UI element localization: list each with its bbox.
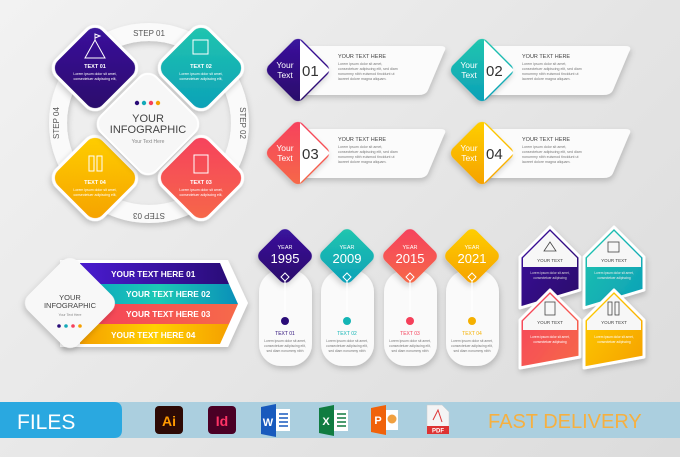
card 03: 03 [302, 146, 319, 163]
panel: step cycle [48, 21, 248, 225]
step labels: STEP 01 [133, 29, 165, 38]
banner bars: YOUR TEXT HERE 01 [111, 269, 196, 279]
arrow card teal: consectetuer adipiscing [597, 276, 631, 280]
diamond: text 01: Lorem ipsum dolor sit amet, [73, 72, 117, 76]
banner bars: YOUR TEXT HERE 03 [126, 309, 211, 319]
step labels: STEP 03 [133, 211, 165, 220]
card 01: Text [277, 70, 293, 80]
banner bars [60, 260, 248, 347]
diamond: text 03: TEXT 03 [190, 180, 212, 186]
diamond: text 04: TEXT 04 [84, 180, 107, 186]
column 1995: YEAR [278, 245, 293, 251]
white diamond: Your Text Here [59, 313, 82, 317]
column 2015: TEXT 03 [400, 331, 420, 337]
column 1995: consectetuer adipiscing elit, [264, 344, 306, 348]
footer bar [0, 402, 680, 438]
diamond: text 04: consectetuer adipiscing elit, [74, 193, 117, 197]
column 2009: sed diam nonummy nibh [329, 349, 366, 353]
card 03: Lorem ipsum dolor sit amet, [338, 145, 382, 149]
card 04 [448, 119, 630, 187]
arrow card yellow: YOUR TEXT [601, 320, 627, 325]
column 2015: consectetuer adipiscing elit, [389, 344, 431, 348]
card 03 [264, 119, 445, 187]
card 03: Your [276, 143, 294, 153]
column 2021: sed diam nonummy nibh [454, 349, 491, 353]
diamond: text 03: consectetuer adipiscing elit, [180, 193, 223, 197]
card 02 [448, 36, 630, 104]
icon: Id [208, 406, 236, 434]
column 2015: 2015 [396, 251, 424, 266]
column 2009: TEXT 02 [337, 331, 357, 337]
arrow card red: consectetuer adipiscing [533, 340, 567, 344]
column 2021: TEXT 04 [462, 331, 482, 337]
card 04: consectetuer adipiscing elit, sed diam [522, 150, 582, 154]
column 1995 [255, 226, 315, 366]
arrow card teal: YOUR TEXT [601, 258, 627, 263]
center diamond [93, 69, 203, 179]
step labels: STEP 04 [52, 107, 61, 139]
card 04: YOUR TEXT HERE [522, 137, 570, 143]
arrow card teal [584, 227, 644, 308]
column 2009: Lorem ipsum dolor sit amet, [326, 339, 368, 343]
column 1995: Lorem ipsum dolor sit amet, [264, 339, 306, 343]
diamond: text 02: consectetuer adipiscing elit, [180, 77, 223, 81]
center diamond: Your Text Here [132, 139, 165, 145]
column 2015: sed diam nonummy nibh [392, 349, 429, 353]
diamond: text 01: TEXT 01 [84, 64, 106, 70]
card 01: Your [276, 60, 294, 70]
card 02: Lorem ipsum dolor sit amet, [522, 62, 566, 66]
arrow card purple: YOUR TEXT [537, 258, 563, 263]
card 03: consectetuer adipiscing elit, sed diam [338, 150, 398, 154]
arrow card purple [520, 227, 580, 308]
diamond: text 04 [48, 131, 142, 225]
card 01: YOUR TEXT HERE [338, 54, 386, 60]
column 1995: 1995 [271, 251, 299, 266]
arrow card red: YOUR TEXT [537, 320, 563, 325]
arrow card red: Lorem ipsum dolor sit amet, [530, 335, 570, 339]
icon: Ai: Ai [162, 413, 176, 429]
card 01: nonummy nibh euismod tincidunt ut [338, 72, 395, 76]
arrow card yellow [584, 290, 644, 368]
column 2015: YEAR [403, 245, 418, 251]
panel: list banner [21, 254, 248, 352]
diamond: text 03 [154, 131, 248, 225]
card 03: nonummy nibh euismod tincidunt ut [338, 155, 395, 159]
white diamond: YOUR [59, 293, 81, 302]
icon: Id: Id [216, 413, 228, 429]
icon: Word: W [263, 417, 274, 429]
card 04: 04 [486, 146, 503, 163]
step labels: STEP 02 [238, 107, 247, 139]
arrow card purple: consectetuer adipiscing [533, 276, 567, 280]
arrow card teal: Lorem ipsum dolor sit amet, [594, 271, 634, 275]
white diamond: INFOGRAPHIC [44, 301, 97, 310]
arrow card purple: Lorem ipsum dolor sit amet, [530, 271, 570, 275]
icon: Excel [319, 405, 348, 436]
column 2015 [380, 226, 440, 366]
column 2009: consectetuer adipiscing elit, [326, 344, 368, 348]
icon: Ai [155, 406, 183, 434]
arrow card yellow: consectetuer adipiscing [597, 340, 631, 344]
center diamond: YOUR [132, 113, 164, 125]
card 03: YOUR TEXT HERE [338, 137, 386, 143]
step labels [52, 29, 247, 220]
card 03: Text [277, 153, 293, 163]
panel: timeline [255, 226, 502, 366]
column 2021: Lorem ipsum dolor sit amet, [451, 339, 493, 343]
card 01: 01 [302, 63, 319, 80]
fast delivery: FAST DELIVERY [488, 411, 642, 433]
column 2021: YEAR [465, 245, 480, 251]
column 1995: sed diam nonummy nibh [267, 349, 304, 353]
card 04: Lorem ipsum dolor sit amet, [522, 145, 566, 149]
icon: Word [261, 404, 290, 437]
card 01: Lorem ipsum dolor sit amet, [338, 62, 382, 66]
card 02: Your [460, 60, 478, 70]
banner bars: YOUR TEXT HERE 04 [111, 330, 196, 340]
arrow card red [520, 290, 580, 368]
icon: PDF: PDF [432, 428, 444, 434]
column 2021 [442, 226, 502, 366]
arrow card yellow: Lorem ipsum dolor sit amet, [594, 335, 634, 339]
icon: PDF [427, 405, 449, 434]
column 2021: 2021 [458, 251, 486, 266]
diamond: text 02: Lorem ipsum dolor sit amet, [179, 72, 223, 76]
card 01: consectetuer adipiscing elit, sed diam [338, 67, 398, 71]
card 02: laoreet dolore magna aliquam. [522, 77, 571, 81]
column 2021: consectetuer adipiscing elit, [451, 344, 493, 348]
column 2015: Lorem ipsum dolor sit amet, [389, 339, 431, 343]
files pill: FILES [17, 411, 75, 434]
banner bars: YOUR TEXT HERE 02 [126, 289, 211, 299]
card 04: Text [461, 153, 477, 163]
card 01: laoreet dolore magna aliquam. [338, 77, 387, 81]
column 2009 [317, 226, 377, 366]
center diamond: INFOGRAPHIC [110, 124, 186, 136]
column 1995: TEXT 01 [275, 331, 295, 337]
column 2009: 2009 [333, 251, 361, 266]
icon: Excel: X [322, 416, 330, 428]
card 04: Your [460, 143, 478, 153]
card 02: nonummy nibh euismod tincidunt ut [522, 72, 579, 76]
panel: arrow cards [520, 227, 644, 368]
diamond: text 01: consectetuer adipiscing elit, [74, 77, 117, 81]
diamond: text 03: Lorem ipsum dolor sit amet, [179, 188, 223, 192]
card 02: YOUR TEXT HERE [522, 54, 570, 60]
diamond: text 02: TEXT 02 [190, 64, 212, 70]
icon: PowerPoint: P [374, 415, 382, 427]
column 2009: YEAR [340, 245, 355, 251]
card 01 [264, 36, 445, 104]
card 02: Text [461, 70, 477, 80]
diamond: text 04: Lorem ipsum dolor sit amet, [73, 188, 117, 192]
card 04: laoreet dolore magna aliquam. [522, 160, 571, 164]
icon: PowerPoint [371, 405, 398, 435]
diamond: text 02 [154, 21, 248, 115]
card 02: 02 [486, 63, 503, 80]
card 03: laoreet dolore magna aliquam. [338, 160, 387, 164]
card 02: consectetuer adipiscing elit, sed diam [522, 67, 582, 71]
diamond: text 01 [48, 21, 142, 115]
white diamond [21, 254, 119, 352]
ring [58, 32, 240, 214]
card 04: nonummy nibh euismod tincidunt ut [522, 155, 579, 159]
files pill [0, 402, 122, 438]
panel: numbered cards [264, 36, 630, 187]
